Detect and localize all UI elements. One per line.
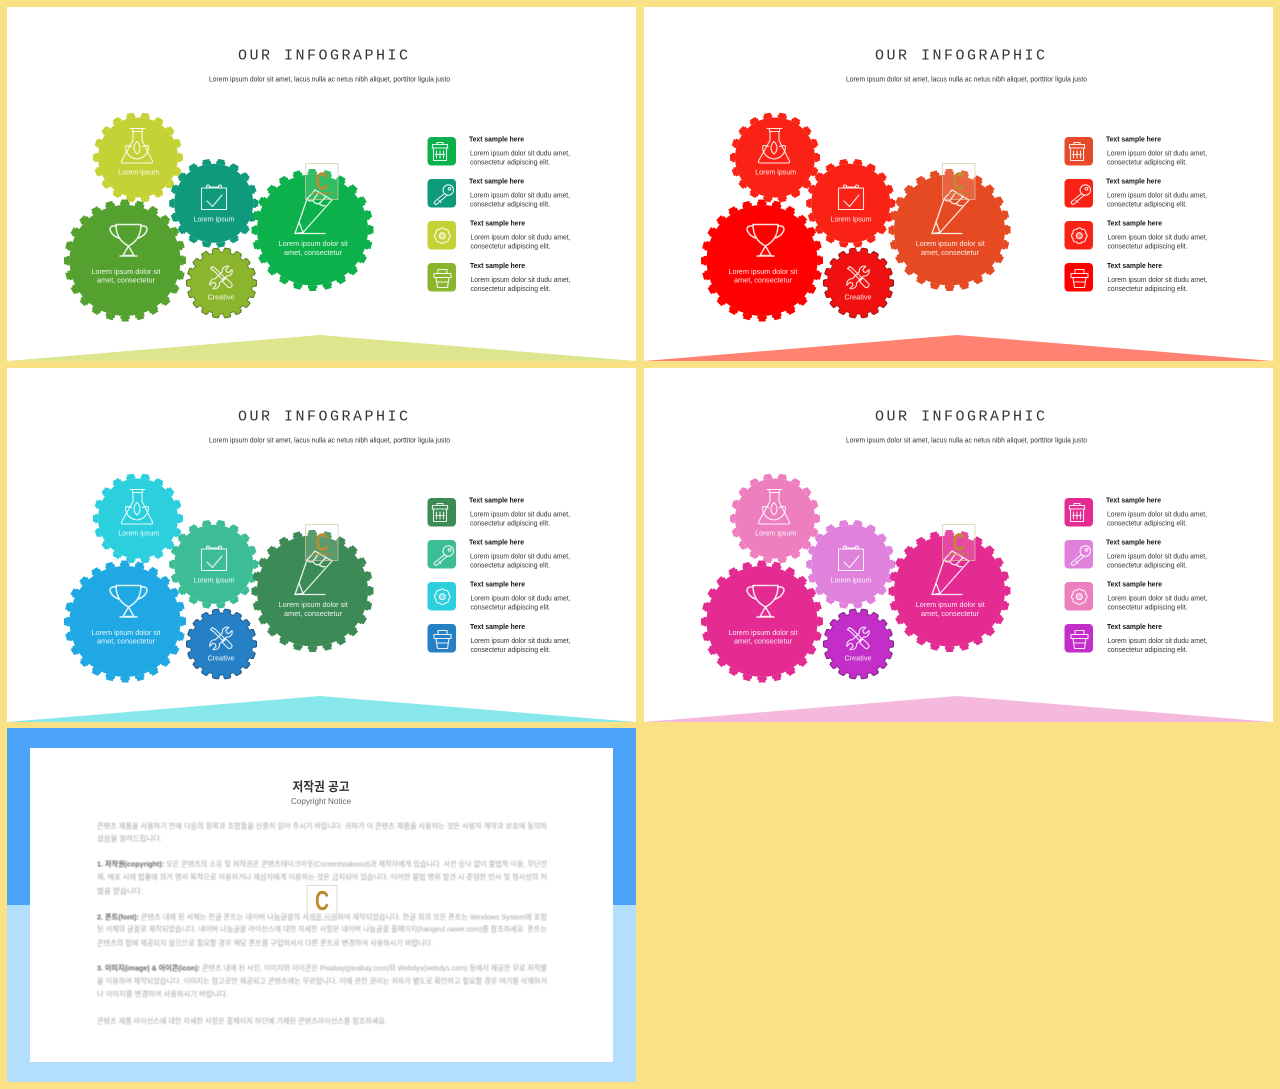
section 1: copyright: 벌을 받습니다. <box>97 887 143 896</box>
list item 3: Lorem ipsum dolor sit dudu amet, <box>1108 232 1208 242</box>
section 3: images and icons: 을 이용하여 제작되었습니다. 이미지는 참고로만 제공되고 콘텐츠에는 무관합니다. 이에 관한 권리는 귀하가 별도로 확인하고 필요할 경우 여기를 삭제하거 <box>97 977 547 986</box>
list item 4 <box>428 261 570 293</box>
watermark <box>942 164 975 200</box>
bottom triangle <box>7 696 636 722</box>
list item 2: Text sample here <box>469 538 524 546</box>
gear: calendar <box>168 519 259 610</box>
gear: flask: Lorem ipsum <box>755 528 796 538</box>
list item 3: consectetur adipiscing elit. <box>1108 602 1188 612</box>
subtitle: Lorem ipsum dolor sit amet, lacus nulla ac netus nibh aliquet, porttitor ligula justo <box>209 436 450 444</box>
list item 1: Text sample here <box>1106 134 1161 144</box>
gear: pencil: amet, consectetur <box>284 248 342 257</box>
slide background <box>644 7 1273 361</box>
lower light-blue background <box>7 905 636 1082</box>
white card <box>30 748 613 1062</box>
watermark: CONTENTS <box>948 552 970 556</box>
gear: trophy <box>63 198 187 323</box>
title: OUR INFOGRAPHIC <box>875 48 1048 64</box>
list item 3: consectetur adipiscing elit. <box>470 242 550 250</box>
list item 1 <box>428 496 570 528</box>
gear: flask <box>729 472 821 565</box>
gear: trophy: amet, consectetur <box>97 636 155 646</box>
list item 4: Text sample here <box>1107 622 1162 631</box>
watermark: C <box>952 529 966 557</box>
list item 2: consectetur adipiscing elit. <box>1107 560 1187 570</box>
list item 1: Text sample here <box>1106 496 1161 504</box>
list item 2: Text sample here <box>1106 176 1161 186</box>
gear: calendar: Lorem ipsum <box>830 576 872 584</box>
gear: tools: Creative <box>208 292 234 302</box>
list item 4: Text sample here <box>470 622 525 631</box>
list item 1: consectetur adipiscing elit. <box>470 518 550 528</box>
title: OUR INFOGRAPHIC <box>875 408 1048 426</box>
gear: pencil <box>887 529 1012 653</box>
panel: red slide <box>644 7 1273 361</box>
list item 1 <box>1064 134 1207 166</box>
watermark: C <box>316 168 328 196</box>
section 3: images and icons <box>97 964 547 999</box>
gear: trophy: amet, consectetur <box>734 636 792 646</box>
list item 4 <box>1064 261 1208 293</box>
slide background <box>7 368 636 722</box>
gear: pencil: Lorem ipsum dolor sit <box>916 239 986 248</box>
list item 1 <box>1064 496 1207 528</box>
list item 4: consectetur adipiscing elit. <box>1108 645 1188 654</box>
list item 2: Lorem ipsum dolor sit dudu amet, <box>470 190 570 200</box>
gear: trophy <box>63 559 187 684</box>
gear: flask: Lorem ipsum <box>755 168 796 176</box>
bottom triangle <box>644 335 1273 361</box>
gear: pencil: Lorem ipsum dolor sit <box>916 600 986 609</box>
gear: pencil <box>250 529 375 653</box>
list item 4 <box>428 622 570 654</box>
gear: flask <box>729 111 821 204</box>
list item 3: Lorem ipsum dolor sit dudu amet, <box>470 594 570 602</box>
gear: trophy <box>700 198 824 323</box>
gear: trophy: Lorem ipsum dolor sit <box>92 628 161 637</box>
gear: pencil: amet, consectetur <box>921 609 979 618</box>
slide background <box>7 7 636 361</box>
list item 3 <box>1064 218 1208 250</box>
gear: calendar <box>805 158 896 249</box>
section 2: font <box>97 913 547 948</box>
list item 3: Text sample here <box>470 580 525 588</box>
gear: tools <box>185 246 258 320</box>
list item 2: Text sample here <box>1106 538 1161 546</box>
subtitle: Lorem ipsum dolor sit amet, lacus nulla ac netus nibh aliquet, porttitor ligula justo <box>846 74 1087 84</box>
bottom triangle <box>644 696 1273 722</box>
gear: pencil: amet, consectetur <box>921 248 979 257</box>
section 1: copyright <box>97 860 547 896</box>
list item 2 <box>1064 538 1207 570</box>
list item 4: Lorem ipsum dolor sit dudu amet, <box>1108 636 1208 645</box>
gear: tools <box>822 607 895 681</box>
list item 3: Text sample here <box>1107 218 1162 228</box>
watermark: CONTENTS <box>948 190 970 196</box>
section 2: font: 2. 폰트(font): 콘텐츠 내에 된 서체는 한글 폰트는 네이버 나눔글꼴의 서체를 사용하여 제작되었습니다. 한글 외의 모든 폰트는 Windows System에 포함 <box>97 913 547 922</box>
gear: pencil <box>887 168 1012 292</box>
list item 4: Text sample here <box>470 261 525 270</box>
list item 1: Text sample here <box>469 134 524 144</box>
list item 3 <box>1064 580 1208 612</box>
gear: calendar: Lorem ipsum <box>194 576 234 584</box>
gear: flask: Lorem ipsum <box>118 528 159 538</box>
gear: flask <box>92 472 184 565</box>
watermark: C <box>315 885 329 916</box>
list item 1: Lorem ipsum dolor sit dudu amet, <box>1107 148 1207 158</box>
list item 2: consectetur adipiscing elit. <box>470 200 550 208</box>
list item 3: consectetur adipiscing elit. <box>1108 242 1188 250</box>
list item 4: Text sample here <box>1107 261 1162 270</box>
list item 3: consectetur adipiscing elit. <box>470 602 550 612</box>
gear: calendar: Lorem ipsum <box>830 214 872 224</box>
list item 4 <box>1064 622 1208 654</box>
list item 2: Lorem ipsum dolor sit dudu amet, <box>1107 190 1207 200</box>
list item 1: Text sample here <box>469 496 524 504</box>
gear: trophy: Lorem ipsum dolor sit <box>728 267 798 276</box>
gear: pencil: amet, consectetur <box>284 609 342 618</box>
title: OUR INFOGRAPHIC <box>238 408 411 426</box>
gear: trophy: amet, consectetur <box>734 276 792 284</box>
closing line: 콘텐츠 제품 라이선스에 대한 자세한 사항은 홈페이지 하단에 기재된 콘텐츠라이선스를 참조하세요. <box>97 1017 387 1026</box>
list item 2: Lorem ipsum dolor sit dudu amet, <box>1107 552 1207 560</box>
list item 3 <box>428 218 570 250</box>
gear: pencil: Lorem ipsum dolor sit <box>279 600 349 609</box>
notice subheading: Copyright Notice <box>291 796 351 806</box>
watermark: C <box>952 168 966 196</box>
panel: copyright notice <box>7 728 636 1082</box>
list item 1: consectetur adipiscing elit. <box>470 158 550 166</box>
list item 1: Lorem ipsum dolor sit dudu amet, <box>470 148 570 158</box>
list item 4: consectetur adipiscing elit. <box>1108 284 1188 293</box>
gear: flask <box>92 111 184 204</box>
list item 4: Lorem ipsum dolor sit dudu amet, <box>470 275 570 284</box>
panel: green slide <box>7 7 636 361</box>
list item 2 <box>428 176 570 208</box>
list item 2 <box>1064 176 1207 208</box>
gear: tools <box>822 246 895 320</box>
list item 1 <box>428 134 570 166</box>
list item 3: Lorem ipsum dolor sit dudu amet, <box>1108 594 1208 602</box>
gear: tools: Creative <box>208 654 234 662</box>
list item 3 <box>428 580 570 612</box>
section 1: copyright: 재, 배포 시에 법률에 의거 영리 목적으로 이용하거나 제삼자에게 이용하는 것은 금지되어 있습니다. 이러한 불법 행위 발견 시 준엄한 민사 및 형사상의 처 <box>97 873 547 882</box>
gear: tools: Creative <box>844 292 872 302</box>
panel: pink slide <box>644 368 1273 722</box>
gear: pencil: Lorem ipsum dolor sit <box>279 239 349 248</box>
list item 3: Text sample here <box>470 218 525 228</box>
notice heading: 저작권 공고 <box>292 779 350 794</box>
list item 2: Lorem ipsum dolor sit dudu amet, <box>470 552 570 560</box>
subtitle: Lorem ipsum dolor sit amet, lacus nulla ac netus nibh aliquet, porttitor ligula justo <box>209 74 450 84</box>
list item 2 <box>428 538 570 570</box>
gear: trophy: Lorem ipsum dolor sit <box>92 267 161 276</box>
section 3: images and icons: 3. 이미지(image) & 아이콘(icon): 콘텐츠 내에 된 사진, 이미지와 아이콘은 Pixabay(pixabay.com)와 Webdys(webdys.com) 등에서 제공한 무료 저작물 <box>97 964 547 973</box>
gear: pencil <box>250 168 375 292</box>
gear: trophy: amet, consectetur <box>97 276 155 284</box>
list item 1: consectetur adipiscing elit. <box>1107 518 1187 528</box>
gear: trophy: Lorem ipsum dolor sit <box>728 628 798 637</box>
list item 2: consectetur adipiscing elit. <box>1107 200 1187 208</box>
gear: flask: Lorem ipsum <box>118 168 159 176</box>
section 1: copyright: 1. 저작권(copyright): 모든 콘텐츠의 소유 및 저작권은 콘텐츠테이크아웃(Contentstakeout)과 제작자에게 있습니다. 사전 승낙 없이 불법적 이용, 무단전 <box>97 860 547 869</box>
subtitle: Lorem ipsum dolor sit amet, lacus nulla ac netus nibh aliquet, porttitor ligula justo <box>846 436 1087 444</box>
bottom triangle <box>7 335 636 361</box>
gear: tools: Creative <box>844 654 872 662</box>
watermark: CONTENTS <box>311 190 333 196</box>
list item 4: consectetur adipiscing elit. <box>470 645 550 654</box>
list item 2: consectetur adipiscing elit. <box>470 560 550 570</box>
watermark: C <box>316 529 328 557</box>
list item 1: consectetur adipiscing elit. <box>1107 158 1187 166</box>
intro paragraph: 셨음을 알려드립니다. <box>97 834 162 843</box>
list item 4: Lorem ipsum dolor sit dudu amet, <box>1108 275 1208 284</box>
watermark: CONTENTS <box>311 552 333 556</box>
gear: calendar <box>168 158 259 249</box>
section 3: images and icons: 나 이미지를 변경하여 사용하시기 바랍니다. <box>97 990 228 999</box>
section 2: font: 된 서체의 글꼴로 제작되었습니다. 네이버 나눔글꼴 라이선스에 대한 자세한 사항은 네이버 나눔글꼴 홈페이지(hangeul.naver.com)를 참조하세요. 폰트는 <box>97 925 547 934</box>
watermark <box>942 524 975 560</box>
gear: calendar: Lorem ipsum <box>194 214 234 224</box>
watermark <box>306 164 338 200</box>
intro paragraph <box>97 822 547 843</box>
list item 3: Lorem ipsum dolor sit dudu amet, <box>470 232 570 242</box>
gear: tools <box>185 607 258 681</box>
panel: blue slide <box>7 368 636 722</box>
slide background <box>644 368 1273 722</box>
section 2: font: 콘텐츠의 합에 제공되지 않으므로 필요할 경우 해당 폰트를 구입하셔서 다른 폰트로 변경하여 사용하시기 바랍니다. <box>97 939 433 948</box>
list item 1: Lorem ipsum dolor sit dudu amet, <box>470 510 570 518</box>
watermark <box>306 524 338 560</box>
list item 3: Text sample here <box>1107 580 1162 588</box>
intro paragraph: 콘텐츠 제품을 사용하기 전에 다음의 항목과 조항들을 신중히 읽어 주시기 바랍니다. 귀하가 이 콘텐츠 제품을 사용하는 것은 사용자 계약과 보호에 동의하 <box>97 822 547 831</box>
list item 4: Lorem ipsum dolor sit dudu amet, <box>470 636 570 645</box>
gear: trophy <box>700 559 824 684</box>
title: OUR INFOGRAPHIC <box>238 48 411 64</box>
gear: calendar <box>805 519 896 610</box>
list item 2: Text sample here <box>469 176 524 186</box>
upper blue background <box>7 728 636 905</box>
list item 1: Lorem ipsum dolor sit dudu amet, <box>1107 510 1207 518</box>
list item 4: consectetur adipiscing elit. <box>470 284 550 293</box>
watermark <box>307 885 337 920</box>
